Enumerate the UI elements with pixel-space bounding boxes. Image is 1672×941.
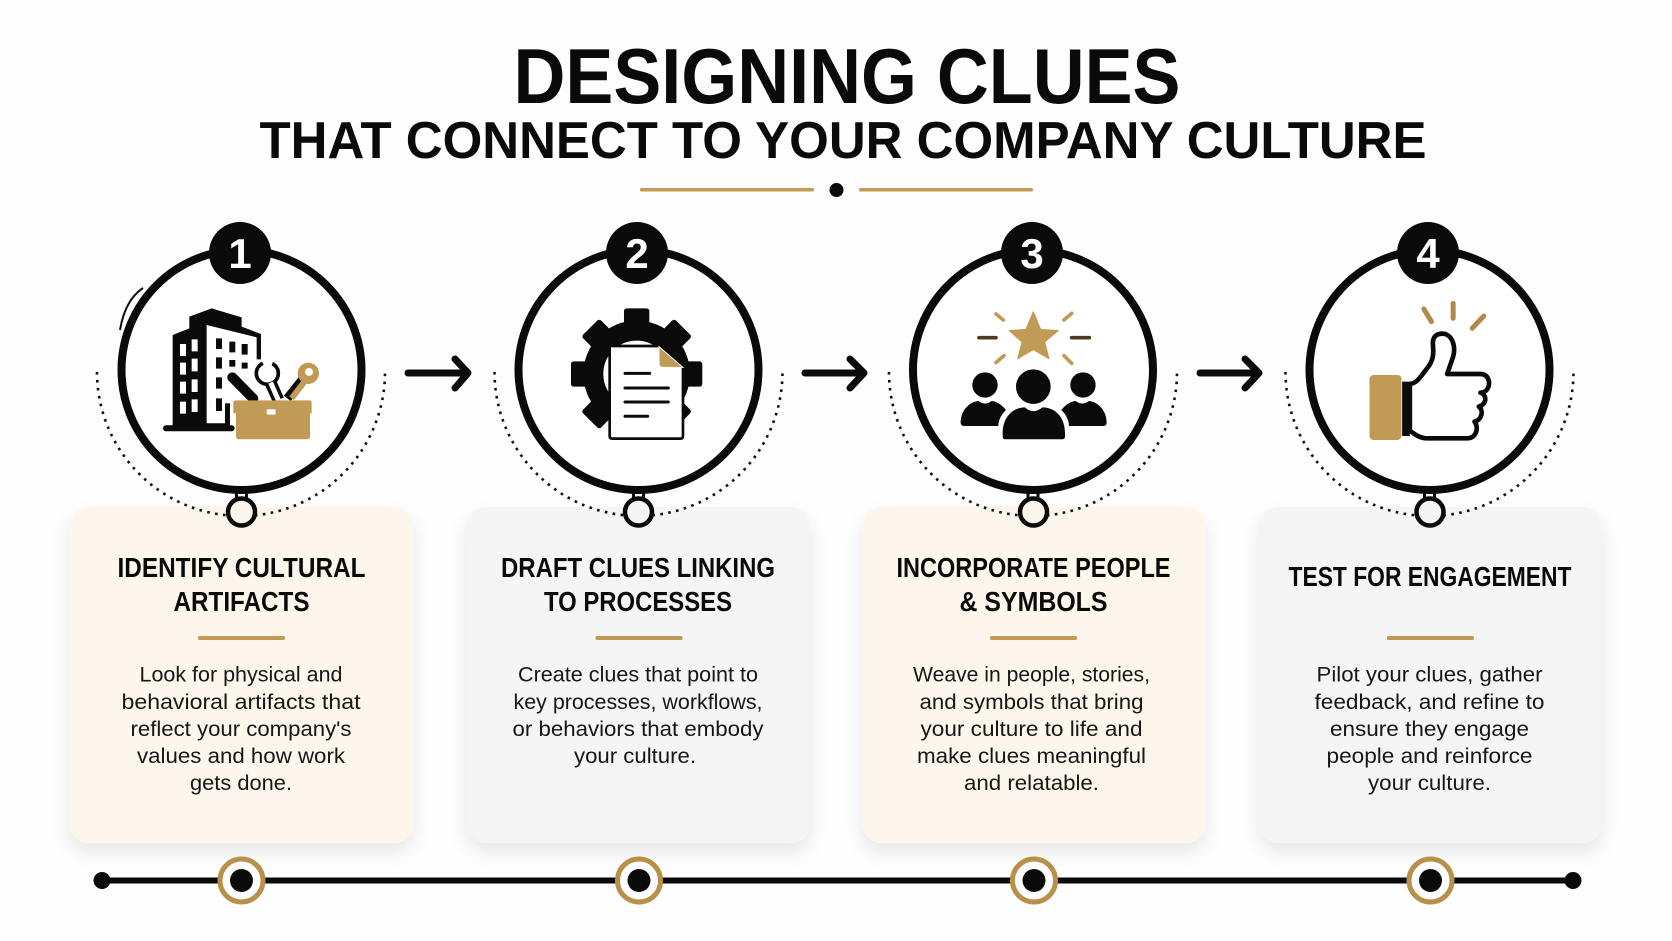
timeline marker 1 <box>220 859 263 902</box>
step 1 number badge <box>209 222 271 284</box>
arrow: step 2 to 3 <box>805 359 864 388</box>
step 4 medallion <box>1286 222 1574 526</box>
step 4 description <box>1314 664 1544 795</box>
title divider <box>640 183 1033 197</box>
step 1 description <box>122 664 361 795</box>
step 1 heading <box>118 552 366 617</box>
step 4 number badge <box>1397 222 1459 284</box>
timeline <box>94 859 1582 902</box>
step 4 description: Pilot your clues, gather <box>1316 664 1543 686</box>
step 4 description: feedback, and refine to <box>1314 691 1544 714</box>
step 3 description: make clues meaningful <box>917 745 1146 768</box>
step 1 description: Look for physical and <box>140 664 342 686</box>
step 3 number badge: 3 <box>1020 230 1044 277</box>
arrow: step 3 to 4 <box>1200 359 1259 388</box>
step 1 description: reflect your company's <box>130 718 352 741</box>
step 2 description: or behaviors that embody <box>512 718 764 741</box>
panel: step 4 card <box>1259 507 1602 843</box>
step 2 number badge <box>606 222 668 284</box>
step 1 number badge: 1 <box>228 230 252 277</box>
step 2 description: Create clues that point to <box>518 664 758 686</box>
step 1 description: behavioral artifacts that <box>122 691 361 714</box>
step 3 heading: INCORPORATE PEOPLE <box>896 552 1170 583</box>
step 2 heading: DRAFT CLUES LINKING <box>501 552 775 583</box>
timeline marker 2 <box>618 859 660 902</box>
step 2 number badge: 2 <box>625 230 649 277</box>
step 3 description: your culture to life and <box>920 718 1142 741</box>
step 1 heading: IDENTIFY CULTURAL <box>118 552 366 583</box>
step 2 heading: TO PROCESSES <box>544 586 732 617</box>
step 4 number badge: 4 <box>1416 230 1440 277</box>
title: THAT CONNECT TO YOUR COMPANY CULTURE <box>260 112 1426 170</box>
step 1 description: gets done. <box>190 772 292 795</box>
icon: building and toolbox <box>166 308 319 439</box>
icon: people and star <box>961 312 1107 439</box>
timeline marker 4 <box>1409 859 1452 902</box>
step 2 heading <box>501 552 775 617</box>
step 3 heading <box>896 552 1170 617</box>
step 3 heading: & SYMBOLS <box>960 586 1108 617</box>
step 4 heading: TEST FOR ENGAGEMENT <box>1288 561 1572 592</box>
step 2 medallion <box>494 222 782 526</box>
step 3 description: and relatable. <box>964 772 1099 795</box>
step 2 description <box>512 664 764 768</box>
step 3 description <box>913 664 1150 795</box>
step 1 heading: ARTIFACTS <box>174 586 310 617</box>
panel: step 1 card <box>69 507 414 843</box>
step 3 medallion <box>889 222 1177 526</box>
step 1 description: values and how work <box>137 745 346 768</box>
timeline marker 3 <box>1012 859 1056 902</box>
icon: thumbs up <box>1369 303 1489 440</box>
panel: step 3 card <box>862 507 1206 843</box>
step 1 medallion <box>97 222 385 526</box>
step 2 description: your culture. <box>574 745 696 768</box>
step 4 description: your culture. <box>1368 772 1491 795</box>
panel: step 2 card <box>466 507 810 843</box>
step 3 number badge <box>1001 222 1063 284</box>
step 4 description: people and reinforce <box>1326 745 1532 768</box>
step 3 description: and symbols that bring <box>920 691 1144 714</box>
step 4 description: ensure they engage <box>1330 718 1529 741</box>
step 3 description: Weave in people, stories, <box>913 664 1150 686</box>
title <box>260 32 1426 170</box>
step 2 description: key processes, workflows, <box>514 691 762 714</box>
arrow: step 1 to 2 <box>408 359 468 388</box>
icon: gear and document <box>571 308 702 440</box>
title: DESIGNING CLUES <box>514 32 1180 120</box>
